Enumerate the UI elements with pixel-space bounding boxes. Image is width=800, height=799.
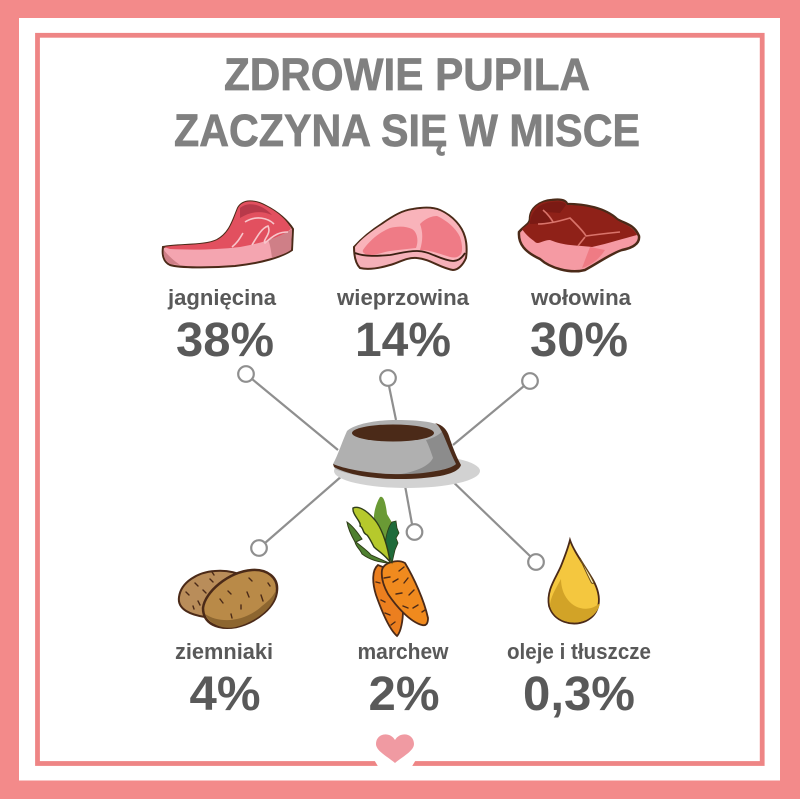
title (174, 49, 640, 156)
label: oils and fats: oleje i tłuszcze (507, 639, 651, 664)
label: carrot: 2% (368, 668, 440, 721)
title: ZACZYNA SIĘ W MISCE (174, 105, 640, 156)
label: beef: wołowina (530, 285, 632, 310)
label: beef (530, 285, 632, 367)
icon: potatoes (179, 570, 277, 628)
label: potatoes (175, 639, 273, 721)
icon: heart (373, 734, 417, 768)
label: lamb: 38% (176, 314, 274, 367)
connector lines (238, 366, 544, 570)
icon: pork chop (354, 208, 467, 270)
label: pork (336, 285, 470, 367)
label: carrot (358, 639, 449, 721)
label: beef: 30% (530, 314, 628, 367)
label: oils and fats: 0,3% (523, 668, 635, 721)
label: potatoes: ziemniaki (175, 639, 273, 664)
icon: bowl (333, 420, 480, 488)
label: pork: 14% (355, 314, 451, 367)
label: pork: wieprzowina (336, 285, 470, 310)
label: potatoes: 4% (190, 668, 260, 721)
icon: lamb steak (163, 201, 293, 267)
label: carrot: marchew (358, 639, 449, 664)
label: lamb: jagnięcina (167, 285, 277, 310)
icon: oil drop (548, 540, 600, 623)
title: ZDROWIE PUPILA (224, 49, 590, 100)
label: lamb (167, 285, 277, 367)
icon: beef (519, 200, 639, 271)
icon: carrots (347, 497, 428, 636)
label: oils and fats (507, 639, 651, 721)
